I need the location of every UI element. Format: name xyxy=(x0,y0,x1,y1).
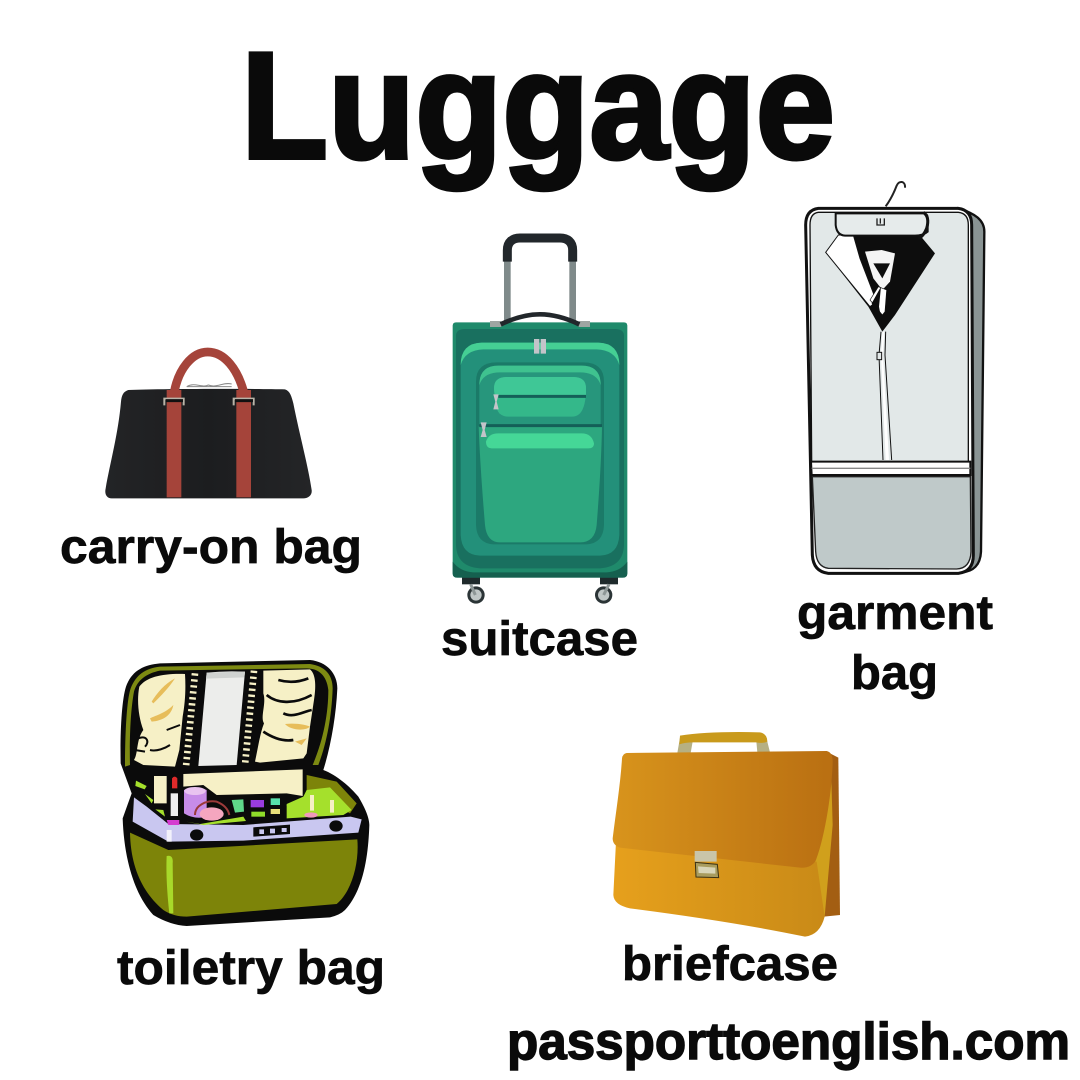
zipper stitches xyxy=(186,671,254,767)
hanger hook xyxy=(886,182,905,206)
logo tag xyxy=(877,218,884,225)
title: Luggage xyxy=(241,21,835,191)
suitcase grip xyxy=(507,238,573,262)
label: toiletry bag: toiletry bag xyxy=(117,942,385,995)
icon: garment bag xyxy=(806,182,984,573)
label: briefcase: briefcase xyxy=(622,938,838,991)
body panel xyxy=(130,833,358,917)
side gusset xyxy=(824,753,840,917)
top flap xyxy=(836,213,928,236)
suitcase body xyxy=(453,322,627,578)
bag zipper xyxy=(187,383,232,387)
telescopic poles xyxy=(504,260,576,322)
front pocket xyxy=(476,362,604,544)
left strap xyxy=(167,390,181,497)
upper bag panel xyxy=(810,212,968,463)
lower body xyxy=(613,842,825,937)
label: bag: bag xyxy=(851,647,938,700)
clasps and latch xyxy=(190,829,203,841)
handle mounts xyxy=(677,736,770,753)
wheels xyxy=(462,575,618,604)
icon: carry-on bag xyxy=(105,352,312,498)
makeup palette xyxy=(232,799,244,813)
bag side depth xyxy=(958,208,984,572)
lower bag panel xyxy=(812,477,971,569)
outer outline xyxy=(121,660,369,926)
lid rim xyxy=(125,664,333,767)
mirror xyxy=(198,671,245,766)
strap buckles xyxy=(164,399,254,405)
label: carry-on bag: carry-on bag xyxy=(60,521,362,574)
bag top handle xyxy=(174,352,244,392)
lipstick xyxy=(171,793,178,816)
right strap xyxy=(236,390,251,497)
pocket zipper band xyxy=(811,462,970,475)
lavender rim xyxy=(133,797,362,842)
clasp xyxy=(695,851,717,862)
bag shell xyxy=(806,208,973,573)
cosmetic jars xyxy=(184,787,207,818)
center zipper xyxy=(879,332,892,460)
icon: briefcase xyxy=(613,732,840,937)
zipper pulls xyxy=(481,339,546,437)
right lining xyxy=(255,669,315,763)
handle xyxy=(679,732,767,744)
lower pocket xyxy=(479,426,602,542)
icon: suitcase xyxy=(453,238,627,604)
website credit: passporttoenglish.com xyxy=(507,1013,1070,1071)
jacket collar xyxy=(826,233,935,332)
label: garment: garment xyxy=(797,587,993,640)
outer panel xyxy=(461,343,619,556)
top handle xyxy=(490,321,590,327)
label: suitcase: suitcase xyxy=(441,613,638,666)
bag body xyxy=(105,389,312,498)
left lining xyxy=(134,674,185,767)
flap xyxy=(613,751,833,868)
inner tray xyxy=(183,769,303,796)
small pocket xyxy=(494,377,586,417)
icon: toiletry bag xyxy=(121,660,369,926)
